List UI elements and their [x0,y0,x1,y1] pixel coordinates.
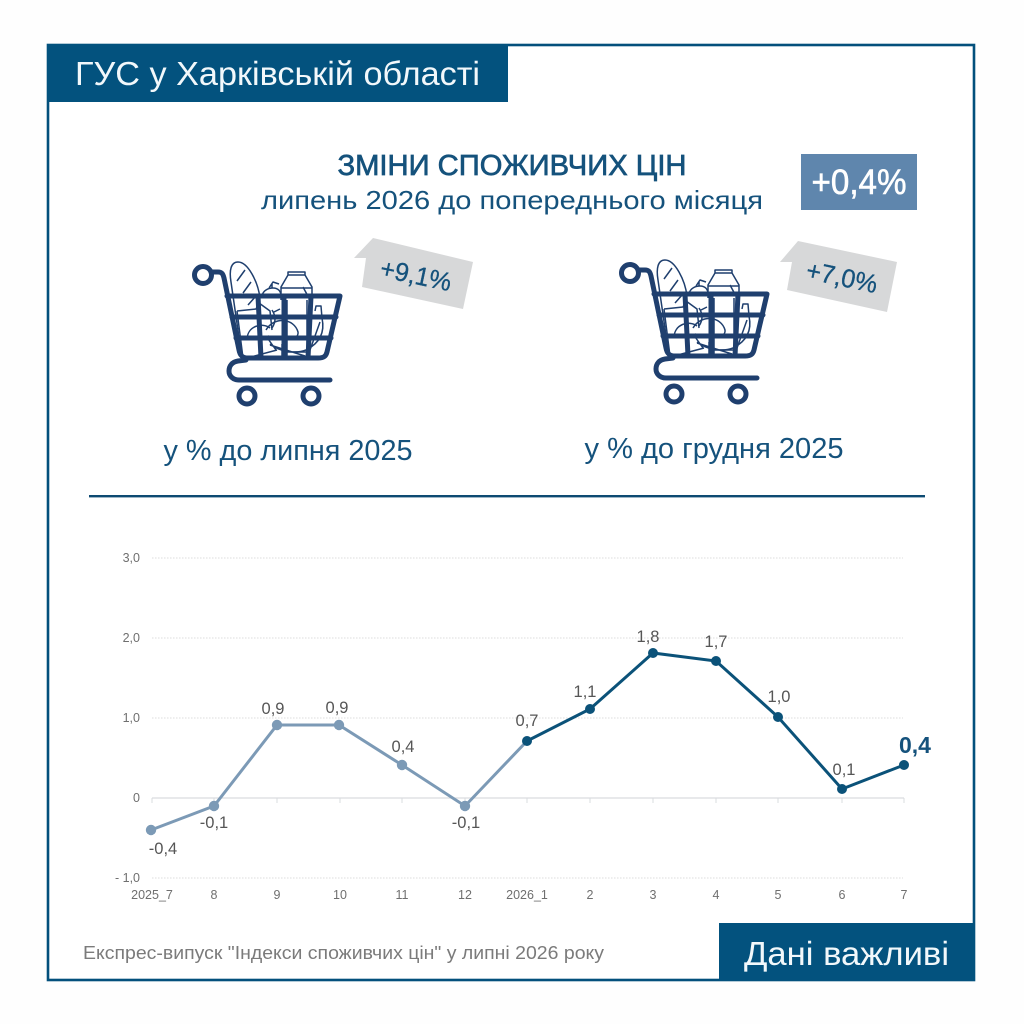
data labels: 1,1 [574,683,596,701]
x axis labels [131,888,908,902]
source note: Експрес-випуск "Індекси споживчих цін" у липні 2026 року [83,943,604,963]
data labels: 0,4 [392,738,414,756]
label: y-o-y: у % до липня 2025 [164,435,412,467]
data labels: 0,7 [516,712,538,730]
icon: shopping cart right [622,260,767,402]
data labels: 0,1 [833,761,855,779]
data labels: 1,0 [768,688,790,706]
main title: липень 2026 до попереднього місяця [261,185,763,215]
icon: shopping cart left [194,262,340,404]
x axis labels: 2025_7 [131,888,173,902]
x axis labels: 5 [775,888,782,902]
series: 2026 [522,648,909,794]
series: 2025 [146,720,527,835]
x axis labels: 7 [901,888,908,902]
x axis labels: 2 [587,888,594,902]
x axis labels: 8 [211,888,218,902]
footer banner [719,923,975,981]
main title [261,150,763,215]
y axis labels: 0 [133,791,140,805]
data labels: 1,7 [705,633,727,651]
main title: ЗМІНИ СПОЖИВЧИХ ЦІН [338,150,686,182]
data labels: -0,1 [200,814,228,832]
x axis labels: 9 [274,888,281,902]
x axis labels: 3 [650,888,657,902]
y axis labels: 3,0 [123,551,140,565]
y axis labels [115,551,140,885]
x axis labels: 10 [333,888,347,902]
highlighted last value: 0,4 [899,732,931,758]
callout: +7,0%: +7,0% [804,255,880,299]
data labels: 0,9 [262,700,284,718]
x axis labels: 12 [458,888,472,902]
x axis labels: 4 [713,888,720,902]
y axis labels: 2,0 [123,631,140,645]
y axis labels: 1,0 [123,711,140,725]
x axis labels: 11 [396,888,409,902]
x axis labels: 6 [839,888,846,902]
header banner: ГУС у Харківській області [75,56,480,93]
data labels: -0,4 [149,840,177,858]
y axis labels: - 1,0 [115,871,140,885]
callout: +9,1% [354,238,473,309]
data labels: 1,8 [637,628,659,646]
header banner [47,44,508,102]
x axis labels: 2026_1 [506,888,548,902]
callout: +7,0% [780,241,897,312]
line chart [115,551,931,902]
data labels [149,628,855,858]
footer banner: Дані важливі [744,936,949,973]
data labels: 0,9 [326,699,348,717]
callout: +9,1%: +9,1% [378,253,454,297]
badge: monthly change: +0,4% [812,163,906,202]
data labels: -0,1 [452,814,480,832]
badge: monthly change [801,154,917,210]
label: to December: у % до грудня 2025 [584,433,844,465]
